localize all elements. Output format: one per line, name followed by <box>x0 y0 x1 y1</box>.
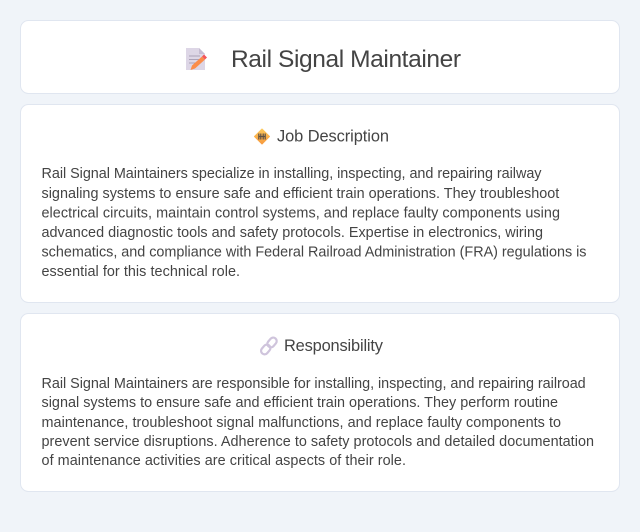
heading: Job Description <box>277 128 389 146</box>
icon: chain link <box>260 336 278 356</box>
panel: title <box>20 20 620 94</box>
heading: Responsibility <box>284 337 384 355</box>
panel: job description <box>20 104 620 302</box>
icon: document with pencil <box>186 48 207 70</box>
text block <box>42 166 586 280</box>
text block: Rail Signal Maintainers specialize in installing, inspecting, and repairing railway <box>42 166 542 182</box>
heading: Rail Signal Maintainer <box>231 46 461 73</box>
panel: responsibility <box>20 314 620 492</box>
text block: signal systems to ensure safe and efficient train operations. They perform routine <box>42 395 558 411</box>
text block: signaling systems to ensure safe and efficient train operations. They troubleshoot <box>42 186 559 202</box>
text block: electrical circuits, maintain control systems, and replace faulty components using <box>42 206 560 222</box>
text block: schematics, and compliance with Federal Railroad Administration (FRA) regulations is <box>42 244 586 260</box>
text block: of maintenance activities are critical aspects of their role. <box>42 453 406 469</box>
text block: Rail Signal Maintainers are responsible for installing, inspecting, and repairing railroad <box>42 376 586 392</box>
text block: maintenance, troubleshoot signal malfunctions, and replace faulty components to <box>42 415 561 431</box>
text block: essential for this technical role. <box>42 264 240 280</box>
text block <box>42 376 594 469</box>
text block: prevent service disruptions. Adherence to safety protocols and detailed documentation <box>42 434 594 450</box>
icon: road sign <box>254 129 270 144</box>
text block: advanced diagnostic tools and safety protocols. Expertise in electronics, wiring <box>42 225 543 241</box>
